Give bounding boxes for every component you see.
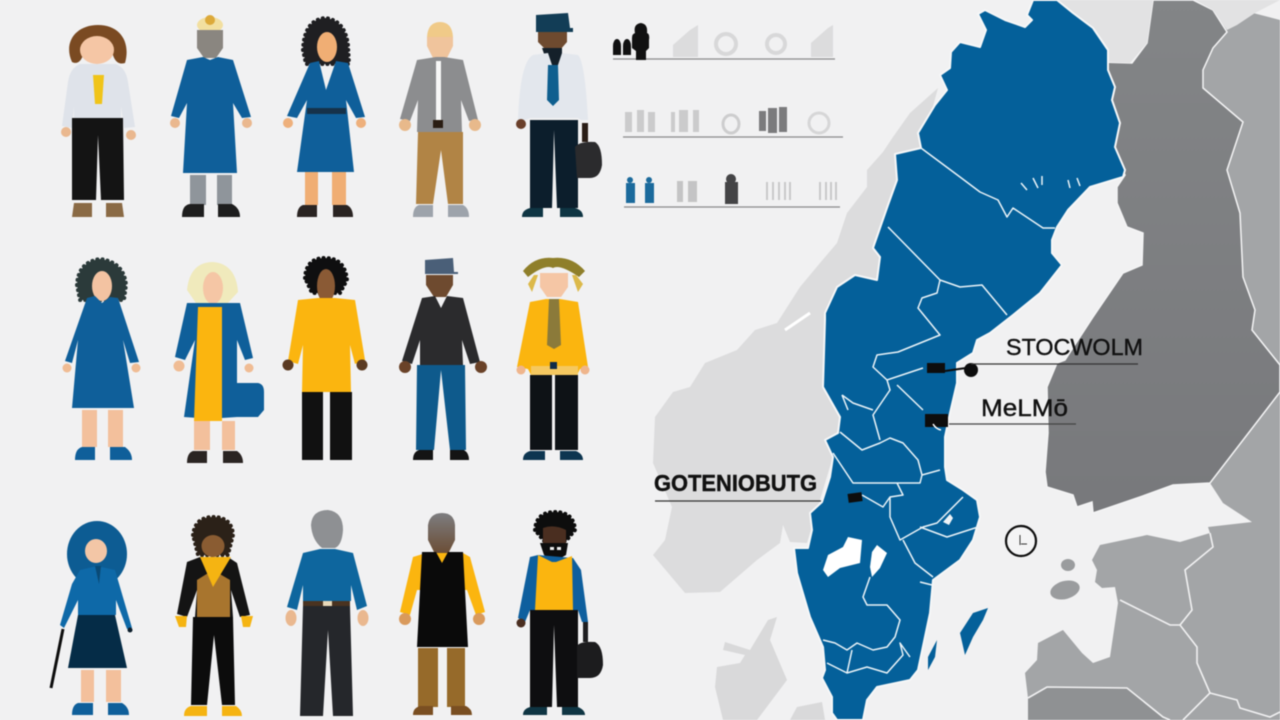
island: Öland xyxy=(928,640,937,670)
label: Stockholm: STOCWOLM xyxy=(1006,334,1143,360)
country: Russia and Baltic states xyxy=(1025,13,1280,720)
lake Vänern xyxy=(823,537,862,577)
country: Denmark and Germany xyxy=(715,617,825,720)
person 6: dark curly hair, blue dress xyxy=(62,259,140,460)
country: Norway xyxy=(653,88,938,593)
marker: Gothenburg xyxy=(848,492,863,503)
person 5: cap, white shirt, blue tie, bag xyxy=(516,13,602,217)
pictogram row 2 xyxy=(623,107,843,137)
person 9: cap, dark sweater, jeans xyxy=(399,258,487,460)
map of Sweden and neighbours xyxy=(653,0,1280,720)
person 11: blue hood, navy skirt, cane xyxy=(51,521,132,715)
person 13: grey hair, blue sweater, dark trousers xyxy=(286,510,368,716)
marker: Malmö xyxy=(925,414,948,430)
person 2: hat, blue robe xyxy=(170,15,252,217)
person 4: blonde, grey cardigan xyxy=(399,22,481,217)
small lake xyxy=(943,514,953,525)
person 3: curly hair, blue dress xyxy=(283,18,366,217)
label: Malmö: MeLMō xyxy=(981,395,1068,422)
white sliver on Norway xyxy=(785,313,810,330)
person 1: brown hair, yellow tie xyxy=(61,25,136,217)
icon: clock marker xyxy=(1006,526,1036,556)
marker: Stockholm xyxy=(927,363,978,377)
regional borders of Sweden xyxy=(823,148,1080,673)
lake Vättern xyxy=(870,545,887,577)
country: Finland xyxy=(1045,0,1280,513)
pictogram row 1 xyxy=(613,23,835,60)
island: Gotland xyxy=(960,608,988,655)
people grid xyxy=(51,13,603,716)
person 15: afro, beard, yellow vest, bag xyxy=(516,512,603,715)
label: Gothenburg: GOTENIOBUTG xyxy=(654,470,817,496)
person 12: curly hair, black jacket, yellow scarf xyxy=(175,517,253,716)
label: Malmö xyxy=(949,395,1076,424)
person 8: afro, yellow top xyxy=(282,258,368,460)
small pictogram chart xyxy=(613,23,843,207)
person 10: olive hat, yellow jacket, tie xyxy=(516,258,590,460)
person 7: blonde, blue coat, yellow dress, bag xyxy=(174,262,264,463)
person 14: grey hair, black vest, yellow sleeves xyxy=(399,513,485,715)
pictogram row 3 xyxy=(624,174,840,207)
country: northern Norway xyxy=(1057,0,1280,63)
country: Sweden xyxy=(794,0,1125,720)
